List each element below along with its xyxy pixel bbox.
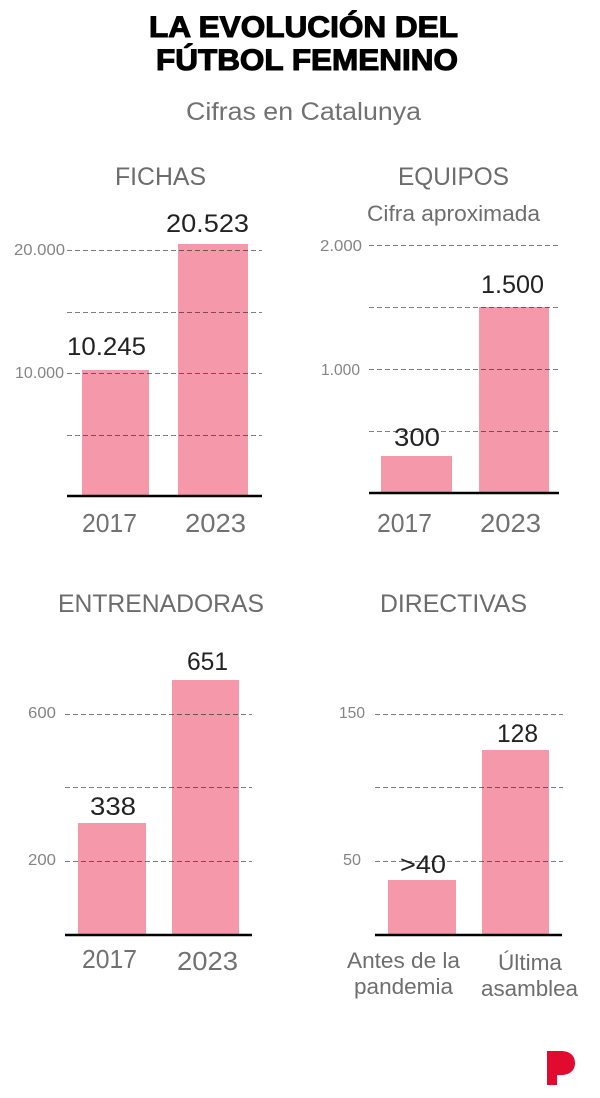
bar chart: directivas: [339, 705, 579, 1001]
bar: 2017: [78, 823, 146, 935]
value: >40: >40: [400, 851, 446, 879]
category: última asamblea: Última: [498, 950, 563, 975]
note: cifra aproximada: Cifra aproximada: [367, 201, 541, 226]
year: 2023: 2023: [480, 508, 541, 538]
year: 2017: 2017: [377, 508, 432, 538]
category: antes de la pandemia: pandemia: [354, 974, 454, 999]
year: 2017: 2017: [82, 508, 137, 538]
subtitle: Cifras en Catalunya: [186, 98, 421, 126]
category: antes de la pandemia: Antes de la: [347, 948, 461, 973]
category: última asamblea: [481, 950, 579, 1001]
bar chart: equipos: [320, 238, 559, 538]
title: [149, 10, 458, 77]
bar: última asamblea: [482, 750, 549, 935]
bar: 2023: [479, 307, 549, 493]
heading: fichas: FICHAS: [115, 163, 206, 191]
value: 1.500: 1.500: [481, 271, 544, 299]
icon: publisher logo: [547, 1051, 575, 1085]
bar: antes de la pandemia: [388, 880, 456, 935]
bar: 2023: [172, 680, 239, 935]
title: LA EVOLUCIÓN DEL: [149, 10, 458, 44]
axis label: 600: 600: [28, 705, 56, 722]
bar chart: entrenadoras: [28, 648, 252, 976]
year: 2023: 2023: [177, 946, 238, 976]
bar: 2023: [178, 244, 248, 496]
value: 128: 128: [497, 720, 538, 748]
axis label: 2.000: 2.000: [320, 238, 362, 255]
heading: entrenadoras: ENTRENADORAS: [58, 590, 264, 618]
value: 20.523: 20.523: [166, 210, 249, 238]
heading: equipos: EQUIPOS: [398, 163, 509, 191]
year: 2017: 2017: [82, 944, 137, 974]
bar: 2017: [82, 370, 149, 496]
value: 338: 338: [90, 793, 136, 821]
panel: fichas: [14, 163, 262, 538]
panel: equipos: [320, 163, 559, 538]
category: última asamblea: asamblea: [481, 976, 579, 1001]
panel: directivas: [339, 590, 579, 1001]
bar: 2017: [381, 456, 452, 493]
category: antes de la pandemia: [347, 948, 461, 999]
value: 300: 300: [394, 424, 440, 452]
axis label: 150: 150: [339, 705, 365, 722]
axis label: 1.000: 1.000: [321, 362, 360, 379]
axis label: 200: 200: [28, 852, 56, 869]
axis label: 10.000: 10.000: [15, 365, 64, 382]
title: FÚTBOL FEMENINO: [156, 43, 458, 77]
panel: entrenadoras: [28, 590, 264, 976]
bar chart: fichas: [14, 210, 262, 538]
value: 10.245: 10.245: [67, 333, 146, 361]
axis label: 50: 50: [343, 852, 361, 869]
heading: directivas: DIRECTIVAS: [380, 590, 527, 618]
year: 2023: 2023: [185, 508, 246, 538]
value: 651: 651: [187, 648, 228, 676]
axis label: 20.000: 20.000: [14, 242, 65, 259]
